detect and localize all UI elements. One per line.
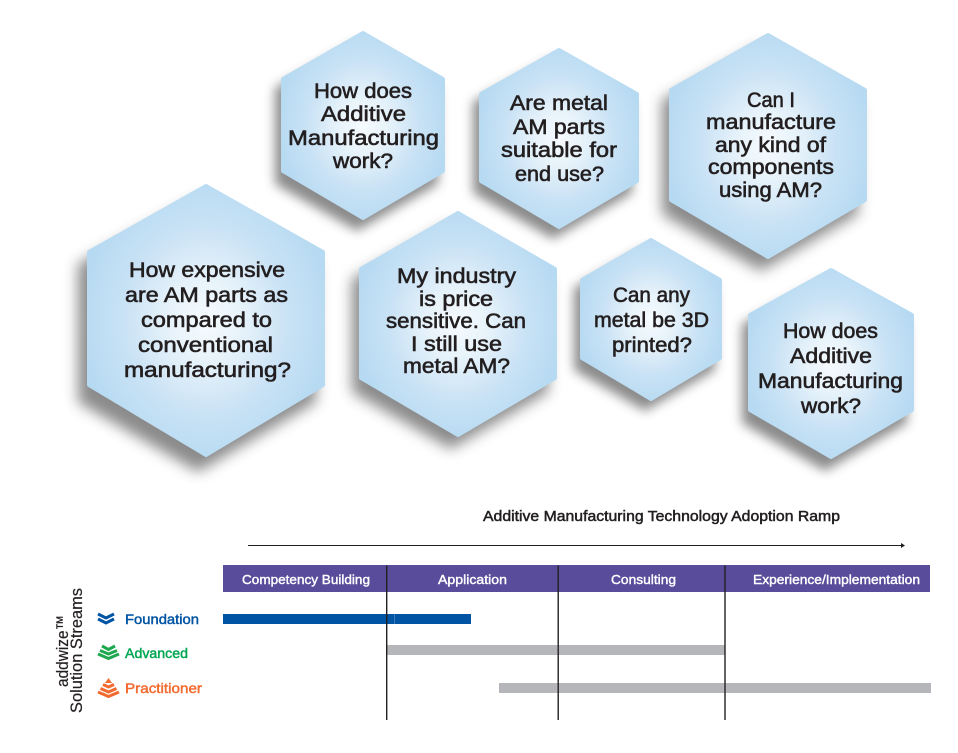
header band: phases: Application bbox=[438, 572, 507, 587]
question text: how does AM work (top): Manufacturing bbox=[288, 127, 439, 150]
question text: how expensive: conventional bbox=[138, 334, 273, 357]
question text: how expensive: manufacturing? bbox=[124, 359, 291, 382]
question text: price sensitive: My industry bbox=[397, 265, 517, 288]
axis label: addwize solution streams: addwize™ bbox=[53, 615, 72, 687]
header band: phases: Experience/Implementation bbox=[753, 572, 920, 587]
question text: price sensitive: is price bbox=[419, 288, 493, 311]
question text: metal AM parts: Are metal bbox=[510, 92, 608, 115]
bar: foundation bbox=[223, 614, 471, 624]
question text: price sensitive: sensitive. Can bbox=[386, 310, 526, 333]
question text: how does AM work (top): work? bbox=[332, 150, 393, 173]
question text: how expensive: are AM parts as bbox=[125, 284, 288, 307]
header band: phases: Consulting bbox=[611, 572, 676, 587]
axis label: addwize solution streams: Solution Streams bbox=[67, 588, 86, 713]
bar: practitioner bbox=[499, 683, 931, 693]
question text: how does AM work (top): How does bbox=[314, 80, 412, 103]
question text: metal AM parts: suitable for bbox=[501, 139, 617, 162]
question text: how expensive: How expensive bbox=[129, 259, 285, 282]
chart title: Additive Manufacturing Technology Adoption Ramp bbox=[483, 508, 840, 525]
question text: any kind of components bbox=[706, 89, 836, 202]
icon: advanced bbox=[98, 646, 119, 658]
header band: phases: Competency Building bbox=[242, 572, 370, 587]
question text: price sensitive bbox=[386, 265, 526, 378]
label: advanced: Advanced bbox=[125, 645, 188, 661]
axis label: addwize solution streams bbox=[53, 588, 86, 713]
hexagon: how does AM work (right) bbox=[742, 270, 912, 471]
question text: how does AM work (top): Additive bbox=[321, 103, 406, 126]
phase dividers bbox=[387, 566, 725, 720]
question text: how does AM work (right): Additive bbox=[790, 345, 872, 368]
question text: price sensitive: metal AM? bbox=[403, 355, 510, 378]
question text: any metal: Can any bbox=[613, 284, 690, 307]
question text: how does AM work (right) bbox=[758, 320, 903, 418]
hexagon: price sensitive bbox=[352, 213, 555, 449]
hexagon: how expensive bbox=[78, 186, 323, 472]
icon: practitioner bbox=[98, 678, 119, 696]
question text: any metal bbox=[594, 284, 709, 357]
hexagon: metal AM parts bbox=[473, 50, 637, 239]
question text: metal AM parts: AM parts bbox=[513, 116, 605, 139]
icon: foundation bbox=[98, 614, 114, 623]
question text: how does AM work (right): work? bbox=[800, 395, 861, 418]
hexagon: how does AM work (top) bbox=[275, 33, 443, 231]
question text: metal AM parts: end use? bbox=[515, 163, 604, 186]
question text: how does AM work (top) bbox=[288, 80, 439, 173]
question text: how expensive bbox=[124, 259, 291, 382]
label: practitioner: Practitioner bbox=[125, 680, 202, 696]
bar: advanced bbox=[387, 645, 725, 655]
question text: any kind of components: manufacture bbox=[706, 111, 836, 134]
question text: any kind of components: any kind of bbox=[715, 134, 826, 157]
question text: price sensitive: I still use bbox=[411, 333, 502, 356]
question text: how expensive: compared to bbox=[141, 309, 272, 332]
header band: phases bbox=[223, 565, 930, 592]
question text: any metal: metal be 3D bbox=[594, 309, 709, 332]
arrow: adoption ramp bbox=[248, 543, 905, 548]
question text: any kind of components: Can I bbox=[747, 89, 795, 112]
label: foundation: Foundation bbox=[125, 611, 199, 627]
question text: metal AM parts bbox=[501, 92, 617, 186]
hexagon: any metal bbox=[574, 240, 720, 411]
hexagon: any kind of components bbox=[662, 35, 865, 271]
question text: any metal: printed? bbox=[612, 334, 692, 357]
question text: how does AM work (right): How does bbox=[783, 320, 878, 343]
question text: any kind of components: using AM? bbox=[719, 179, 822, 202]
question text: how does AM work (right): Manufacturing bbox=[758, 370, 903, 393]
question text: any kind of components: components bbox=[708, 156, 834, 179]
